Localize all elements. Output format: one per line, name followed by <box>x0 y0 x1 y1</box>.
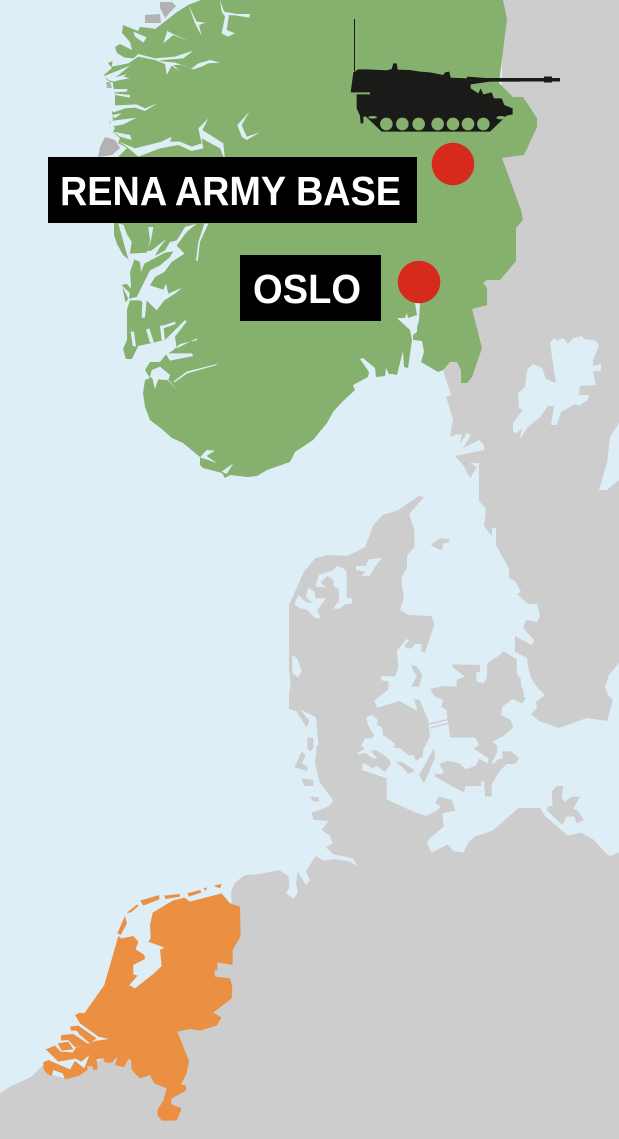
Danish islands <box>294 538 584 825</box>
Netherlands, orange <box>43 884 241 1121</box>
label: Rena Army Base: RENA ARMY BASE <box>60 168 401 214</box>
Limfjord waters <box>292 558 382 678</box>
label: Rena Army Base <box>48 157 417 223</box>
islands among the fjords <box>122 251 173 299</box>
Zeeland islands <box>58 1026 97 1051</box>
icon: self-propelled howitzer tank <box>351 19 560 132</box>
land: Denmark and northern Germany <box>289 496 619 895</box>
gray islets off Norway <box>98 2 176 157</box>
fjords of western Norway, middle <box>110 89 225 160</box>
Norway, green <box>104 0 537 478</box>
location dot: Rena <box>432 143 474 185</box>
Wadden islands <box>117 884 222 935</box>
fjords of southwestern Norway <box>131 320 217 392</box>
lake in Sweden <box>513 336 601 438</box>
fjords of western Norway, south of label <box>118 224 208 318</box>
upper reach of the middle fjord <box>237 112 260 140</box>
label: Oslo <box>240 255 381 321</box>
land: Germany and Belgium <box>0 870 619 1139</box>
fjords of the south coast <box>200 450 233 474</box>
location dot: Oslo <box>398 261 440 303</box>
fjords of western Norway, north <box>104 0 250 82</box>
label: Oslo: OSLO <box>253 266 361 312</box>
land: Sweden <box>430 0 619 728</box>
